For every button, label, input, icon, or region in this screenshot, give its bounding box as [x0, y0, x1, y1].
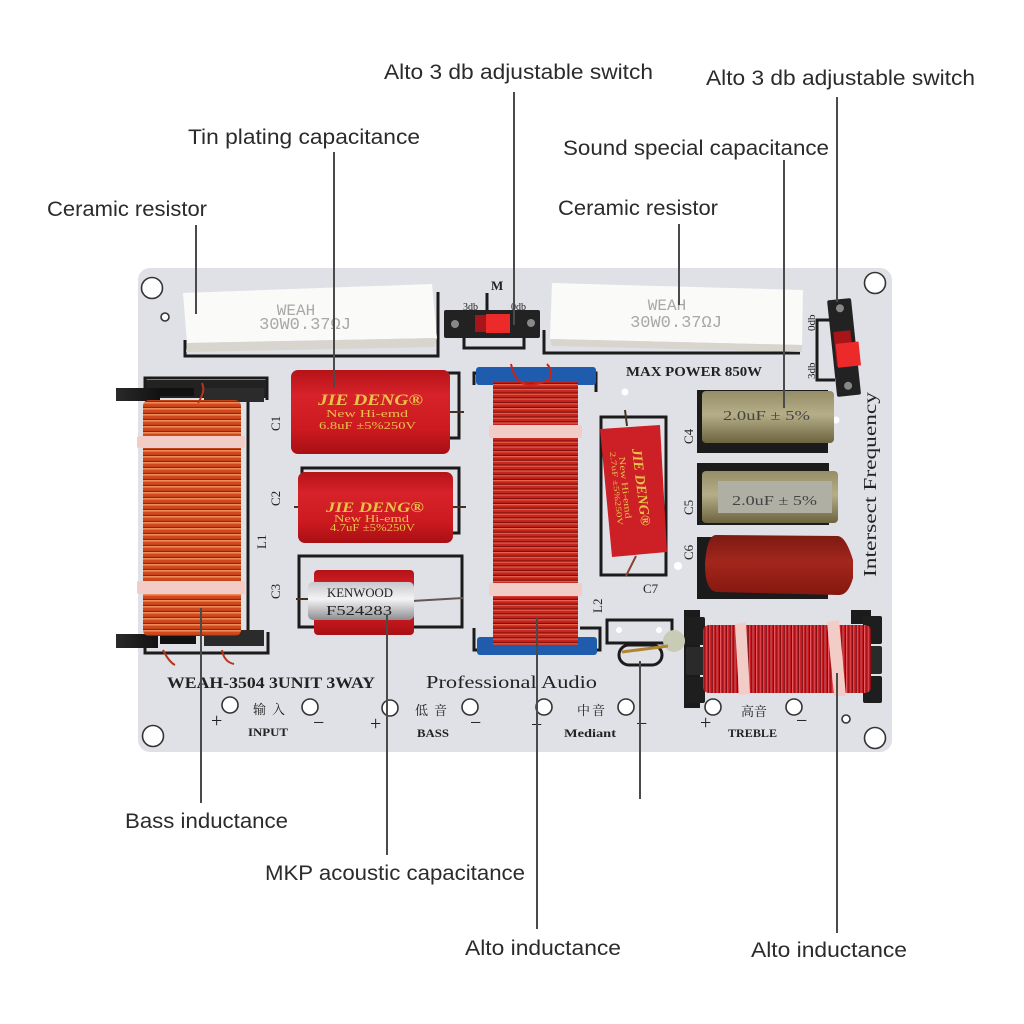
capacitor C7: 2.7uF ±5%250V	[608, 451, 625, 526]
board silkscreen text: −	[470, 712, 481, 734]
capacitor C4: 2.0uF ± 5%	[723, 409, 810, 424]
board silkscreen text: 3db	[806, 362, 818, 379]
ceramic resistor left	[183, 284, 437, 352]
board silkscreen text: −	[313, 712, 324, 734]
board silkscreen text: 0db	[511, 302, 526, 313]
capacitor C1: 6.8uF ±5%250V	[319, 420, 416, 432]
label: MKP acoustic capacitance: MKP acoustic capacitance	[265, 862, 525, 885]
small white pads	[616, 388, 840, 633]
label: ceramic resistor right: Ceramic resistor	[558, 197, 718, 220]
board silkscreen text: WEAH-3504 3UNIT 3WAY	[167, 675, 375, 692]
mounting holes	[142, 272, 886, 748]
board silkscreen text: C5	[681, 500, 696, 515]
board silkscreen text: −	[796, 710, 807, 732]
capacitor C5: 2.0uF ± 5%	[732, 494, 817, 509]
board silkscreen text: M	[491, 278, 503, 293]
capacitor C3 MKP	[296, 570, 463, 635]
label: alto switch right: Alto 3 db adjustable switch	[706, 67, 975, 90]
label: ceramic resistor left: Ceramic resistor	[47, 198, 207, 221]
board silkscreen text: C3	[268, 584, 283, 599]
alto inductor L2	[476, 364, 597, 655]
circuit board	[138, 268, 892, 752]
board silkscreen text: +	[211, 710, 222, 732]
board silkscreen text: +	[700, 712, 711, 734]
capacitor C1: JIE DENG®	[317, 392, 423, 409]
slide switch middle	[444, 310, 540, 338]
capacitor C7: JIE DENG®	[628, 447, 652, 527]
capacitor C2: JIE DENG®	[325, 500, 424, 516]
board silkscreen text: INPUT	[248, 725, 288, 739]
capacitor C4	[702, 391, 834, 443]
capacitor C2	[294, 472, 466, 543]
ceramic resistor left: WEAH	[277, 302, 315, 320]
label: alto switch middle: Alto 3 db adjustable switch	[384, 61, 653, 84]
board silkscreen text: +	[531, 714, 542, 736]
silkscreen outlines	[145, 292, 871, 708]
board silkscreen text: Professional Audio	[426, 672, 597, 692]
board silkscreen text: 中音	[577, 703, 605, 718]
board silkscreen text: BASS	[417, 726, 449, 740]
board silkscreen text: 输 入	[253, 702, 285, 717]
capacitor C7	[600, 410, 667, 576]
label: tin plating capacitance: Tin plating capacitance	[188, 126, 420, 149]
label: sound special capacitance: Sound special capacitance	[563, 137, 829, 160]
capacitor C1: New Hi-emd	[326, 408, 409, 420]
capacitor C2: 4.7uF ±5%250V	[330, 523, 416, 534]
capacitor C6	[705, 535, 853, 595]
board silkscreen text: C4	[681, 428, 696, 444]
slide switch right	[827, 298, 864, 397]
capacitor C7: New Hi-emd	[617, 456, 634, 520]
board silkscreen text: Intersect Frequency	[860, 392, 880, 577]
board silkscreen text: 3db	[463, 302, 478, 313]
board silkscreen text: L1	[254, 535, 269, 549]
ceramic resistor left: 30W0.37ΩJ	[259, 316, 351, 335]
bass inductor L1	[116, 380, 266, 665]
label: alto inductance center: Alto inductance	[465, 937, 621, 960]
capacitor C1	[291, 370, 464, 454]
board silkscreen text	[167, 278, 880, 740]
label: bass inductance: Bass inductance	[125, 810, 288, 833]
capacitor C3 MKP: KENWOOD	[327, 585, 393, 600]
board silkscreen text: MAX POWER 850W	[626, 365, 762, 380]
board silkscreen text: 0db	[806, 314, 818, 331]
ceramic resistor right: WEAH	[648, 297, 686, 315]
board silkscreen text: +	[370, 713, 381, 735]
board silkscreen text: −	[636, 713, 647, 735]
label: alto inductance right: Alto inductance	[751, 939, 907, 962]
capacitor C3 MKP: F524283	[326, 604, 392, 619]
board silkscreen text: Mediant	[564, 726, 616, 740]
capacitor C5	[702, 471, 838, 523]
board silkscreen text: 低 音	[415, 703, 447, 718]
board silkscreen text: L2	[590, 599, 605, 613]
treble inductor L3	[622, 616, 882, 703]
capacitor C2: New Hi-emd	[334, 514, 409, 525]
board silkscreen text: C7	[643, 581, 659, 596]
board silkscreen text: C6	[681, 544, 696, 560]
board silkscreen text: TREBLE	[728, 726, 777, 740]
board silkscreen text: C2	[268, 491, 283, 506]
board silkscreen text: C1	[268, 416, 283, 431]
board silkscreen text: 高音	[741, 704, 767, 719]
ceramic resistor right: 30W0.37ΩJ	[630, 314, 722, 333]
leader lines	[196, 92, 837, 933]
ceramic resistor right	[550, 283, 803, 352]
